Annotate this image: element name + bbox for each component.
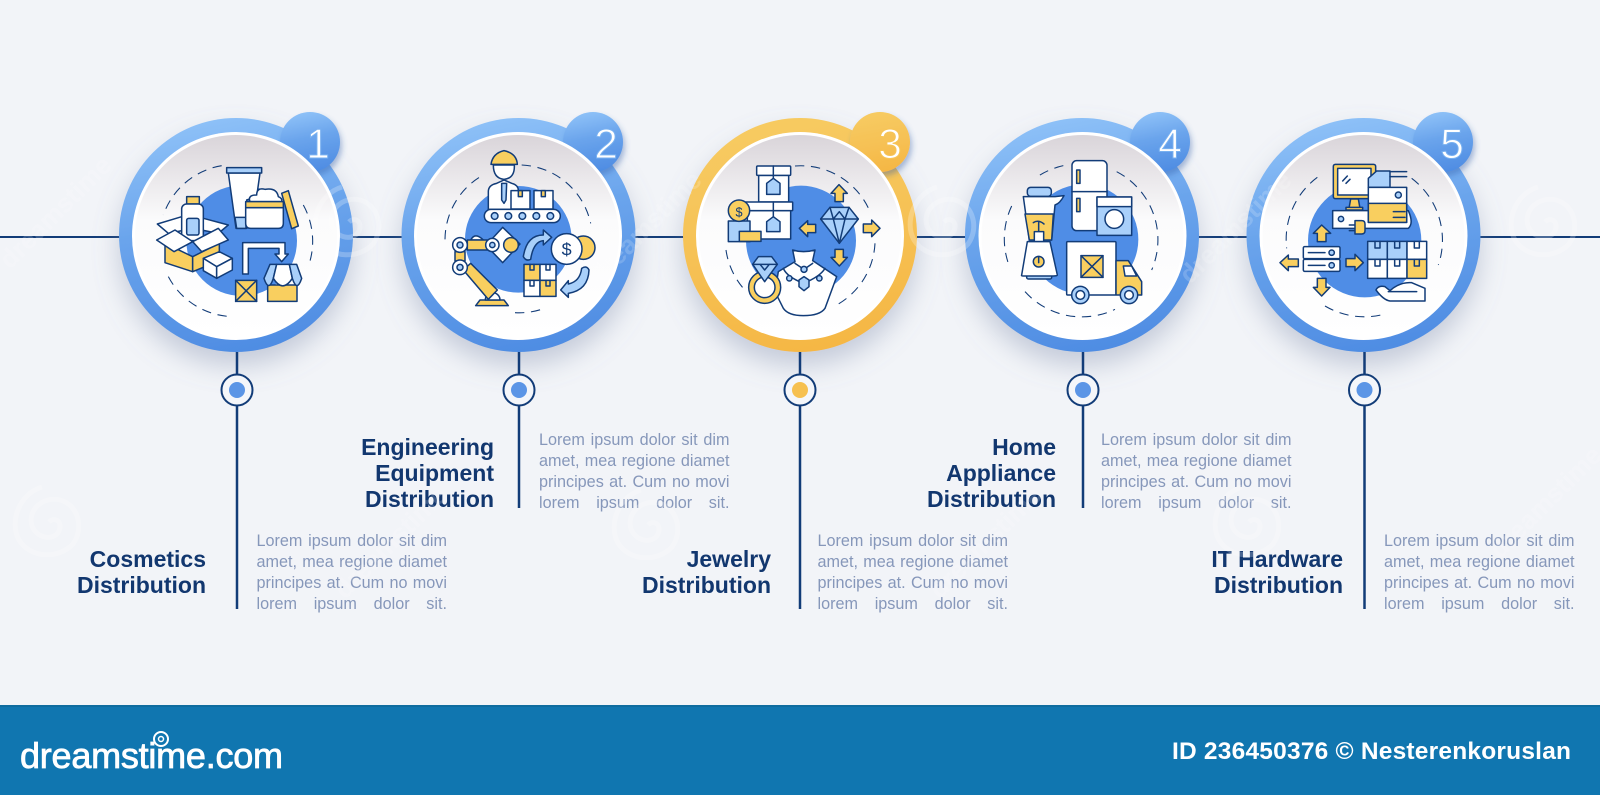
outer ring 2 [402, 118, 636, 352]
outer ring 3 [683, 118, 917, 352]
text: step 4 description: amet, mea regione diamet [1101, 452, 1292, 470]
number badge 2 [563, 112, 623, 172]
number badge 1: 1 [306, 120, 330, 167]
icon: jewelry distribution: $ [735, 206, 743, 220]
text: step 5 description: lorem ipsum dolor sit. [1384, 595, 1574, 613]
number badge 1 [280, 112, 340, 172]
connector node 3 [784, 352, 816, 609]
number badge 5 [1413, 112, 1473, 172]
connector node 1 [222, 352, 252, 609]
heading: IT Hardware Distribution [1211, 546, 1343, 598]
text: step 4 description: Lorem ipsum dolor sit dim [1101, 430, 1292, 448]
text: step 4 description: principes at. Cum no movi [1101, 472, 1292, 490]
heading: Cosmetics Distribution [77, 546, 206, 598]
stock photo watermark overlay: dreamstime [923, 480, 1047, 604]
text: step 2 description: principes at. Cum no movi [539, 472, 730, 490]
inner disc 4 [978, 132, 1186, 340]
number badge 5: 5 [1440, 120, 1464, 167]
number badge 2: 2 [594, 120, 618, 167]
icon: IT hardware distribution [1280, 164, 1442, 317]
outer ring 1 [119, 118, 353, 352]
footer band [0, 705, 1600, 795]
text: step 2 description [539, 430, 730, 512]
inner disc 1 [132, 132, 340, 340]
timeline axis [0, 236, 1600, 238]
text: step 3 description: amet, mea regione diamet [818, 553, 1008, 571]
heading: Engineering Equipment Distribution: Equipment [375, 460, 494, 486]
panel: step 3 jewelry circle [683, 112, 917, 352]
footer image id and author: ID 236450376 © Nesterenkoruslan [1172, 738, 1571, 765]
text: step 1 description: principes at. Cum no movi [256, 574, 447, 592]
text: step 3 description [818, 532, 1008, 613]
number badge 3 [850, 112, 910, 172]
heading: Jewelry Distribution [642, 546, 771, 598]
heading: Home Appliance Distribution: Distribution [927, 486, 1056, 512]
heading: Jewelry Distribution: Jewelry [687, 546, 771, 572]
inner disc 3 [696, 132, 904, 340]
connector node 2 [504, 352, 534, 508]
outer ring 5 [1246, 118, 1480, 352]
heading: IT Hardware Distribution: Distribution [1214, 572, 1343, 598]
panel: step 4 home appliance circle [965, 112, 1199, 352]
text: step 2 description: amet, mea regione diamet [539, 452, 730, 470]
icon: engineering equipment distribution [445, 151, 595, 313]
footer logo: dreamstime.com [20, 735, 283, 776]
text: step 4 description: lorem ipsum dolor sit. [1101, 494, 1292, 512]
connector node 5 [1349, 352, 1380, 609]
number badge 4: 4 [1158, 120, 1182, 167]
text: step 1 description: Lorem ipsum dolor sit dim [256, 532, 447, 550]
text: step 5 description: Lorem ipsum dolor sit dim [1384, 532, 1574, 550]
text: step 1 description: lorem ipsum dolor sit. [256, 595, 447, 613]
text: step 3 description: principes at. Cum no movi [818, 574, 1008, 592]
text: step 1 description [256, 532, 447, 613]
text: step 5 description: amet, mea regione diamet [1384, 553, 1574, 571]
stock photo watermark overlay: dreamstime [328, 480, 452, 604]
heading: Jewelry Distribution: Distribution [642, 572, 771, 598]
panel: step 1 cosmetics circle [119, 112, 353, 352]
text: step 2 description: lorem ipsum dolor sit. [539, 494, 730, 512]
heading: Engineering Equipment Distribution: Distribution [365, 486, 494, 512]
heading: Engineering Equipment Distribution [361, 434, 494, 512]
text: step 3 description: lorem ipsum dolor sit. [818, 595, 1008, 613]
panel: step 5 IT hardware circle [1246, 112, 1480, 352]
icon: home appliance distribution [1004, 161, 1158, 317]
stock photo watermark overlay: dreamstime [1173, 165, 1297, 289]
heading: Cosmetics Distribution: Cosmetics [90, 546, 206, 572]
heading: Engineering Equipment Distribution: Engineering [361, 434, 494, 460]
connector node 4 [1068, 352, 1098, 508]
heading: Home Appliance Distribution: Appliance [946, 460, 1056, 486]
text: step 2 description: Lorem ipsum dolor sit dim [539, 430, 730, 448]
number badge 3: 3 [878, 120, 902, 167]
icon: cosmetics distribution [157, 166, 313, 317]
stock photo watermark overlay: dreamstime [583, 165, 707, 289]
heading: Cosmetics Distribution: Distribution [77, 572, 206, 598]
icon: engineering equipment distribution: $ [562, 239, 572, 259]
heading: Home Appliance Distribution: Home [992, 434, 1056, 460]
inner disc 2 [414, 132, 622, 340]
icon: jewelry distribution [726, 166, 880, 316]
panel: step 2 engineering equipment circle [402, 112, 636, 352]
text: step 1 description: amet, mea regione diamet [256, 553, 447, 571]
outer ring 4 [965, 118, 1199, 352]
inner disc 5 [1260, 132, 1468, 340]
text: step 5 description: principes at. Cum no movi [1384, 574, 1574, 592]
text: step 4 description [1101, 430, 1292, 512]
number badge 4 [1130, 112, 1190, 172]
text: step 5 description [1384, 532, 1574, 613]
heading: IT Hardware Distribution: IT Hardware [1211, 546, 1343, 572]
text: step 3 description: Lorem ipsum dolor sit dim [818, 532, 1008, 550]
heading: Home Appliance Distribution [927, 434, 1056, 512]
